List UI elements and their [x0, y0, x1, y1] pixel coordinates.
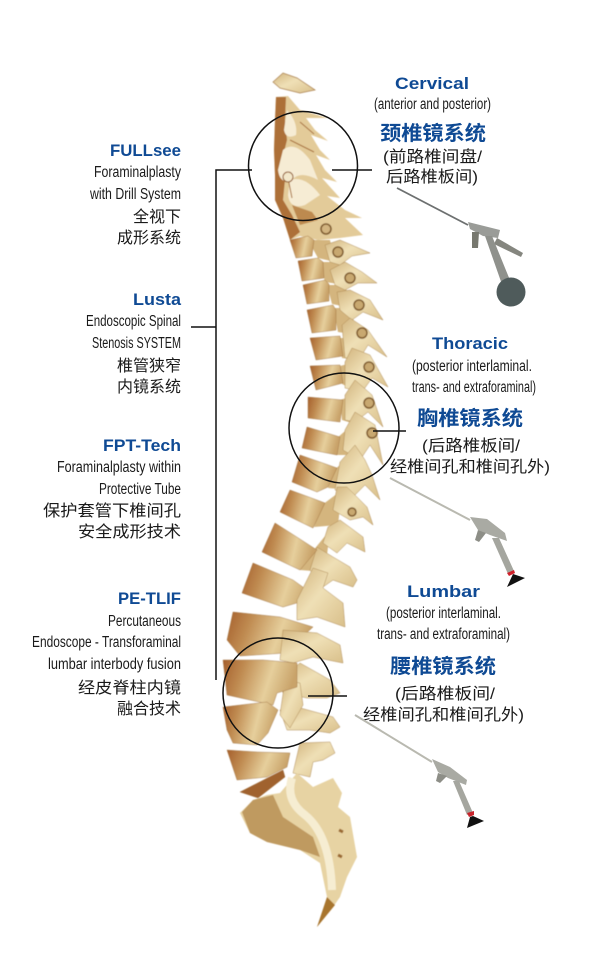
text block: Cervical: 颈椎镜系统 [380, 121, 486, 145]
sacrum [240, 773, 357, 927]
text block: PE-TLIF: Endoscope - Transforaminal [32, 634, 181, 651]
text block: Lusta: 内镜系统 [117, 377, 181, 396]
text block: Lumbar: Lumbar [407, 582, 480, 601]
text block: Cervical [374, 74, 491, 186]
text block: FPT-Tech: Protective Tube [99, 481, 181, 498]
connector: lumbar [308, 695, 347, 697]
text block: PE-TLIF: PE-TLIF [118, 589, 181, 608]
text block: Cervical: (前路椎间盘/ [383, 147, 483, 166]
text block: Cervical: (anterior and posterior) [374, 96, 491, 113]
circle: thoracic highlight [289, 373, 399, 483]
text block: PE-TLIF: 融合技术 [117, 700, 181, 718]
circle: lumbar highlight [223, 638, 333, 748]
icon: thoracic endoscope [390, 478, 525, 587]
icon: lumbar endoscope [355, 715, 484, 828]
text block: PE-TLIF: 经皮脊柱内镜 [78, 678, 181, 697]
text block: Thoracic: 胸椎镜系统 [417, 406, 523, 430]
text block: Lusta: 椎管狭窄 [117, 357, 181, 375]
text block: Lumbar: 腰椎镜系统 [390, 654, 496, 678]
text block: Lumbar [363, 582, 524, 724]
text block: Cervical: 后路椎板间) [386, 168, 478, 186]
icon: cervical endoscope [397, 188, 526, 306]
text block: Lumbar: trans- and extraforaminal) [377, 626, 510, 643]
text block: FPT-Tech: FPT-Tech [103, 436, 181, 455]
text block: Lusta [86, 290, 182, 396]
text block: Lumbar: (posterior interlaminal. [386, 605, 501, 622]
left bracket connector [191, 170, 252, 680]
text block: FPT-Tech: 保护套管下椎间孔 [43, 502, 181, 520]
pedicles [300, 240, 358, 572]
text block: Cervical: Cervical [395, 74, 469, 93]
lumbar processes [280, 568, 345, 777]
text block: FULLsee [89, 141, 181, 247]
text block: Thoracic [390, 334, 550, 476]
text block: Lusta: Endoscopic Spinal [86, 313, 181, 330]
text block: FPT-Tech: 安全成形技术 [78, 523, 181, 541]
text block: Thoracic: 经椎间孔和椎间孔外) [390, 458, 550, 476]
thoracic vertebral bodies [227, 236, 343, 656]
text block: FULLsee: FULLsee [110, 141, 181, 160]
circle: cervical highlight [248, 112, 358, 220]
text block: FPT-Tech [43, 436, 181, 541]
cervical vertebrae [273, 73, 363, 240]
connector: thoracic [373, 430, 406, 432]
text block: PE-TLIF [32, 589, 181, 718]
illustration: human spine [223, 73, 388, 927]
lumbar vertebral bodies [223, 660, 297, 798]
text block: FULLsee: 成形系统 [117, 229, 181, 247]
text block: Thoracic: (posterior interlaminal. [412, 358, 532, 375]
text block: FULLsee: with Drill System [89, 186, 181, 203]
text block: Thoracic: Thoracic [432, 334, 508, 353]
text block: Thoracic: (后路椎板间/ [422, 437, 521, 455]
text block: Lusta: Lusta [133, 290, 182, 309]
text block: Lumbar: (后路椎板间/ [395, 685, 496, 703]
text block: PE-TLIF: Percutaneous [108, 613, 181, 630]
text block: Thoracic: trans- and extraforaminal) [412, 379, 536, 396]
text block: FULLsee: Foraminalplasty [94, 164, 181, 181]
text block: Lumbar: 经椎间孔和椎间孔外) [363, 706, 524, 724]
connector: cervical [332, 169, 372, 171]
thoracic facets [333, 247, 377, 516]
text block: Lusta: Stenosis SYSTEM [92, 335, 181, 352]
text block: FPT-Tech: Foraminalplasty within [57, 459, 181, 476]
thoracic processes [310, 240, 388, 587]
text block: PE-TLIF: lumbar interbody fusion [48, 656, 181, 673]
text block: FULLsee: 全视下 [133, 208, 181, 226]
